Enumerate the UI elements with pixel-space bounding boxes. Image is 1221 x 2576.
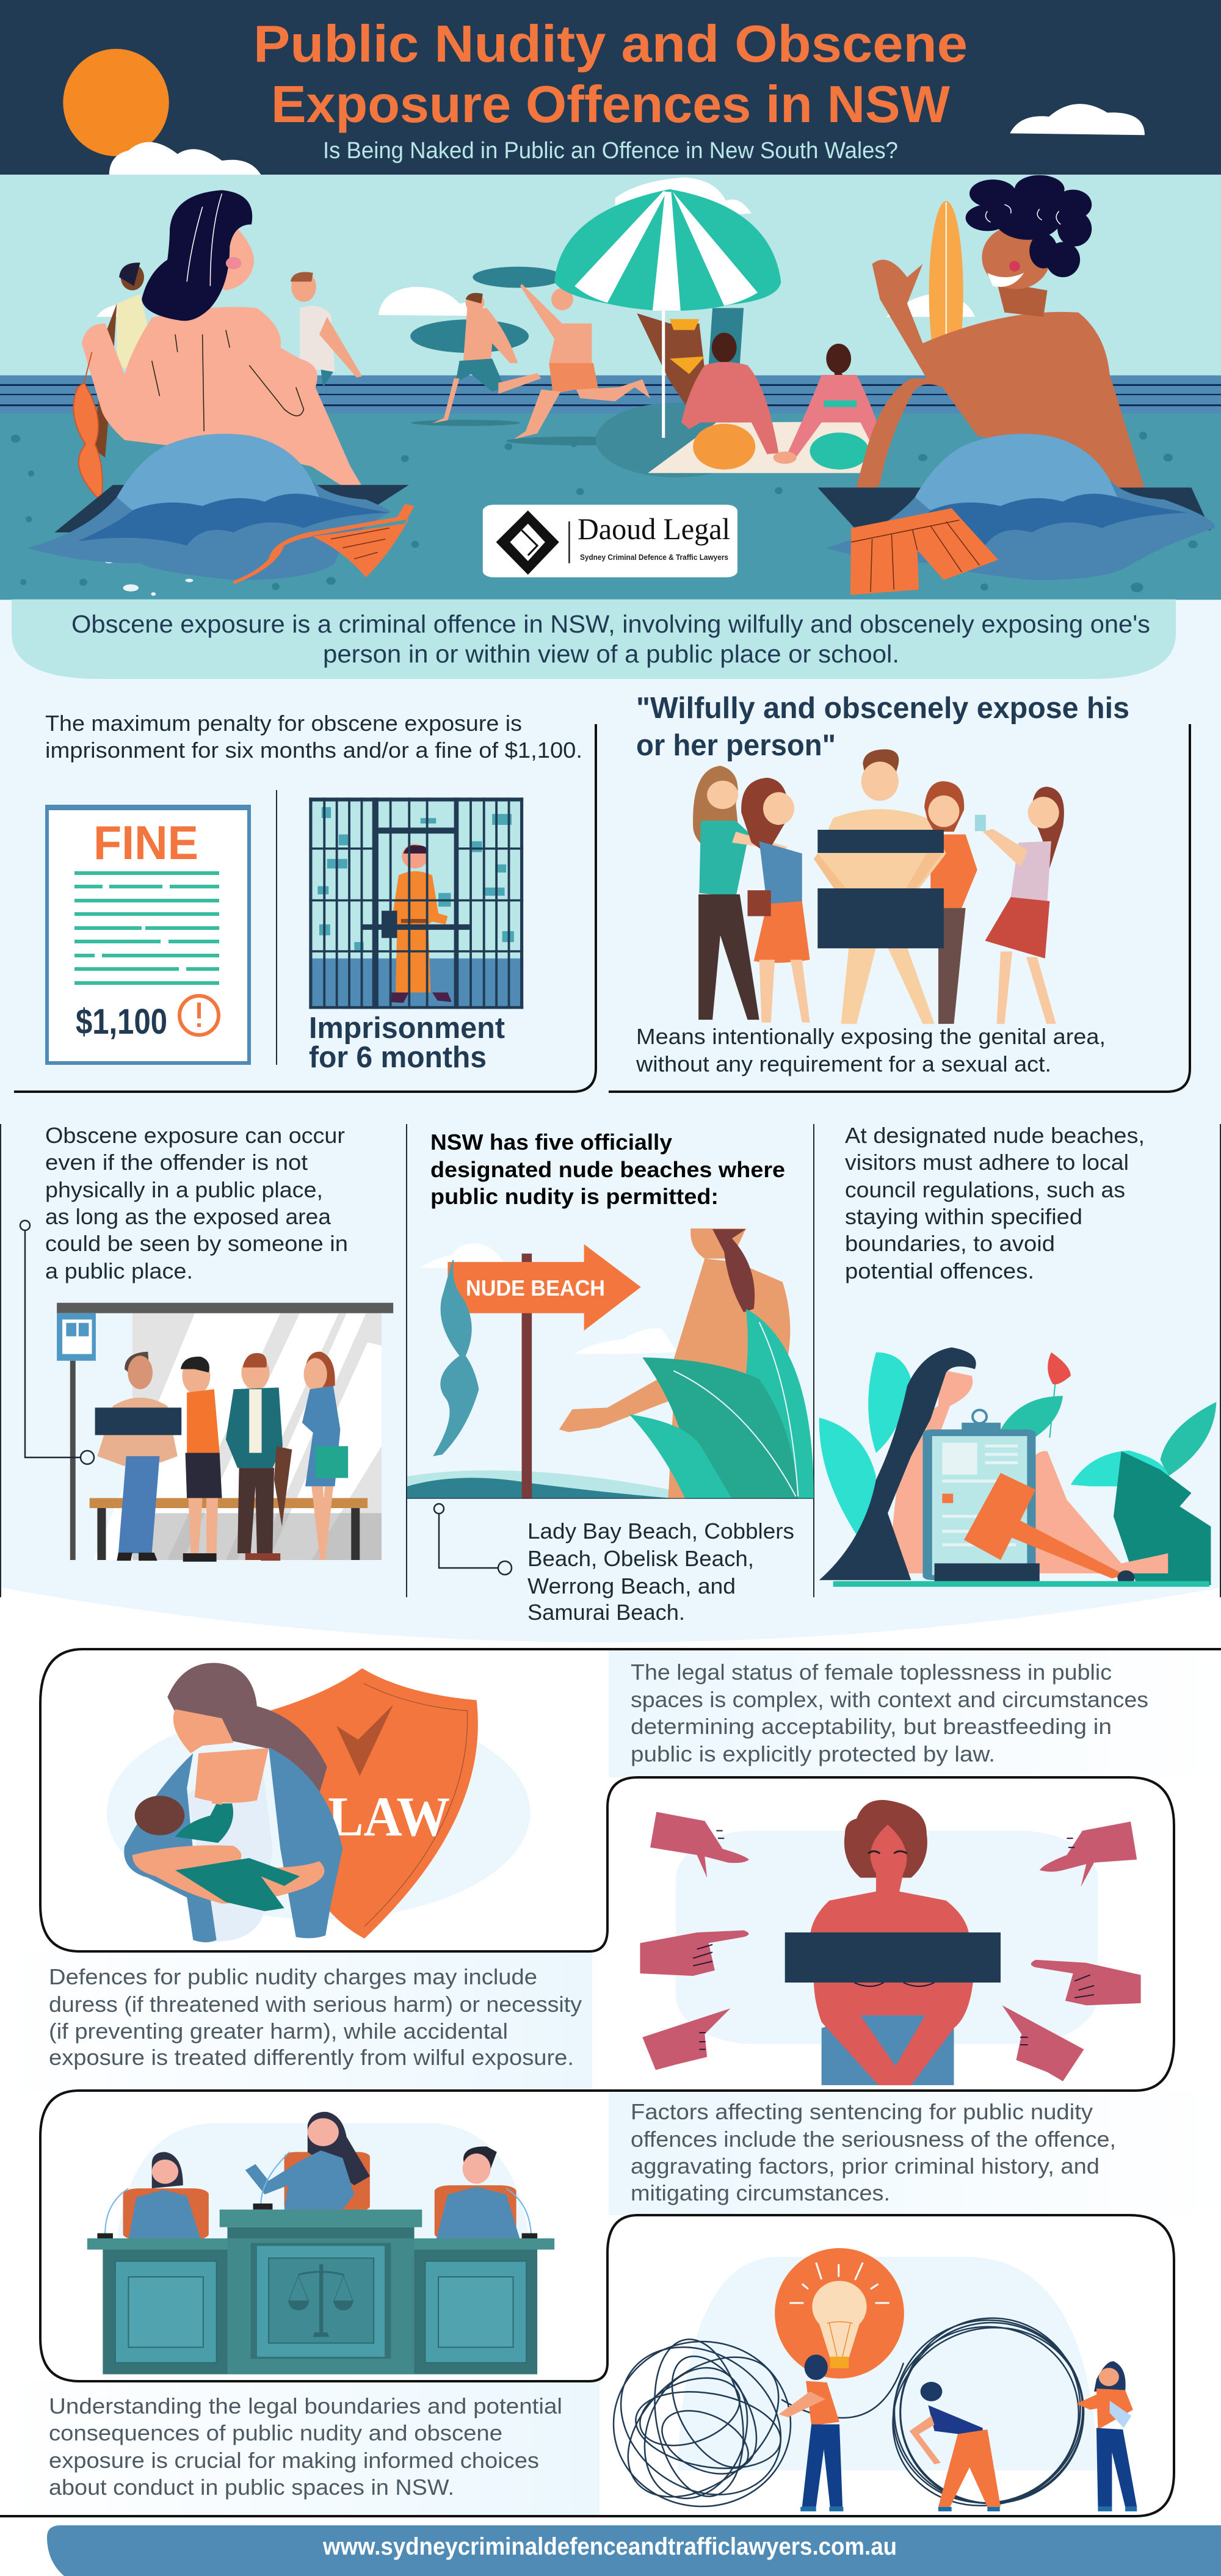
penalty text: imprisonment for six months and/or a fine of $1,100. (45, 738, 582, 763)
panel: maximum penalty (14, 711, 596, 1092)
logo wordmark (578, 512, 730, 562)
column text: even if the offender is not (45, 1150, 308, 1175)
female toplessness text: spaces is complex, with context and circumstances (631, 1687, 1148, 1712)
panel: definition of wilfully and obscenely expose (609, 692, 1190, 1092)
woman from behind (559, 1228, 790, 1499)
censor bars (817, 830, 944, 948)
icon: right cloud (1010, 104, 1145, 135)
logo wordmark: Daoud Legal (578, 512, 730, 546)
jail cell illustration (309, 797, 523, 1009)
column text: boundaries, to avoid (845, 1231, 1055, 1256)
imprisonment label: Imprisonment (309, 1012, 505, 1045)
woman right (1076, 2361, 1137, 2511)
defences text (49, 1964, 582, 2070)
cell bars (309, 797, 523, 1009)
imprisonment label (309, 1012, 505, 1074)
right officer (435, 2146, 537, 2240)
exposed man (814, 749, 946, 1024)
column: local council regulations (819, 1123, 1216, 1587)
woman under umbrella (637, 308, 744, 405)
light panel behind female toplessness text (609, 1650, 1221, 1777)
title: Public Nudity and Obscene (253, 15, 968, 73)
footer bar (47, 2525, 1221, 2576)
sentencing factors text: mitigating circumstances. (631, 2180, 890, 2205)
hero: header band and beach scene (0, 0, 1221, 679)
clipboard (922, 1410, 1040, 1582)
right dark mat (817, 488, 1211, 530)
distant surfers and runners (410, 267, 654, 445)
orange bikini bottom (234, 504, 415, 584)
connector line with nodes (20, 1221, 94, 1464)
column text: council regulations, such as (845, 1177, 1125, 1202)
closing text: about conduct in public spaces in NSW. (49, 2475, 454, 2500)
female toplessness text (631, 1660, 1148, 1766)
panel: idea and tangled thread illustration (592, 2248, 1137, 2536)
sentencing factors text: Factors affecting sentencing for public nudity (631, 2099, 1093, 2124)
panel: courtroom illustration (87, 2112, 554, 2375)
panel: woman being pointed at (640, 1800, 1141, 2085)
imprisonment label: for 6 months (309, 1041, 487, 1074)
penalty text: The maximum penalty for obscene exposure is (45, 711, 522, 736)
finger creases (693, 1830, 1094, 2049)
fine document: $1,100 (76, 1002, 167, 1042)
hanging bikini (433, 1260, 479, 1456)
foliage (819, 1352, 1216, 1585)
column text: physically in a public place, (45, 1177, 323, 1202)
right man (853, 175, 1176, 513)
left dark mat (54, 485, 409, 532)
orange swim shorts (850, 508, 998, 595)
fine document (45, 805, 251, 1063)
sky (0, 175, 1221, 377)
panel border (609, 724, 1190, 1092)
sky clouds (96, 177, 975, 317)
woman in red skirt (975, 786, 1064, 1024)
column: designated nude beaches (407, 1130, 814, 1625)
icon: left cloud (109, 142, 262, 176)
woman figure (810, 1800, 973, 2085)
woman left (779, 2354, 843, 2511)
law text: LAW (328, 1785, 450, 1848)
column text: At designated nude beaches, (845, 1123, 1145, 1148)
left officer (97, 2152, 209, 2240)
subtitle: Is Being Naked in Public an Offence in New South Wales? (323, 138, 898, 164)
beach towel and shade (596, 402, 894, 477)
header band (0, 0, 1221, 175)
judges bench (87, 2210, 554, 2375)
connector line with nodes (434, 1504, 512, 1575)
defences text: (if preventing greater harm), while accidental (49, 2019, 508, 2044)
defences text: duress (if threatened with serious harm) or necessity (49, 1992, 582, 2017)
prisoner (387, 844, 452, 1003)
judge (245, 2112, 370, 2211)
censor bar (785, 1932, 1001, 1983)
definition text (636, 1024, 1106, 1076)
woman in teal (693, 766, 786, 1020)
female toplessness text: public is explicitly protected by law. (631, 1741, 995, 1766)
defences text: exposure is treated differently from wilful exposure. (49, 2045, 574, 2070)
light panel behind closing text (0, 2381, 600, 2516)
left blue wave mound (27, 434, 391, 580)
tangled thread ball (592, 2317, 904, 2525)
woman with clipboard and gavel illustration (819, 1348, 1216, 1587)
panel: breastfeeding illustration (107, 1663, 531, 1942)
orange bikini top (73, 352, 103, 502)
backdrop and lightbulb (678, 2248, 1098, 2470)
woman figure (819, 1348, 1168, 1580)
nude beach sign text: NUDE BEACH (466, 1275, 605, 1301)
woman center (910, 2382, 1001, 2511)
column text: a public place. (45, 1258, 193, 1283)
closing text: exposure is crucial for making informed choices (49, 2448, 539, 2473)
logo card (483, 505, 737, 578)
column text (45, 1123, 348, 1283)
logo wordmark: Sydney Criminal Defence & Traffic Lawyers (580, 553, 728, 562)
penalty text (45, 711, 582, 763)
closing text (49, 2393, 562, 2500)
column text: as long as the exposed area (45, 1204, 332, 1229)
light panel behind defences text (0, 1951, 592, 2091)
exposed man at stop (97, 1352, 178, 1561)
sand (0, 413, 1221, 600)
man in green jacket (226, 1353, 292, 1561)
closing text: consequences of public nudity and obscene (49, 2420, 502, 2445)
umbrella pole (662, 308, 665, 438)
female toplessness text: The legal status of female toplessness in public (631, 1660, 1112, 1685)
beach list: Werrong Beach, and (527, 1573, 736, 1598)
censor bar (95, 1407, 181, 1435)
palm leaves (629, 1309, 814, 1499)
crowd illustration (693, 749, 1064, 1024)
beach list: Samurai Beach. (527, 1600, 685, 1625)
bold intro text: NSW has five officially (430, 1130, 672, 1155)
definition text: without any requirement for a sexual act. (636, 1051, 1051, 1076)
defences text: Defences for public nudity charges may include (49, 1964, 537, 1989)
striped umbrella (554, 189, 781, 311)
column text: staying within specified (845, 1204, 1082, 1229)
sentencing factors text: aggravating factors, prior criminal history, and (631, 2153, 1100, 2179)
bold intro text: designated nude beaches where (430, 1157, 785, 1182)
woman in blue and orange (741, 778, 810, 1023)
icon: sun (63, 49, 169, 156)
heading: or her person" (636, 729, 836, 762)
title: Exposure Offences in NSW (271, 76, 951, 134)
panel border (14, 724, 596, 1092)
column text: could be seen by someone in (45, 1231, 348, 1256)
beach list: Beach, Obelisk Beach, (527, 1546, 754, 1571)
bus stop illustration (57, 1303, 393, 1562)
column: view of a public place (20, 1123, 393, 1562)
heading: "Wilfully and obscenely expose his (636, 692, 1129, 725)
bold intro text: public nudity is permitted: (430, 1184, 719, 1209)
gavel (964, 1473, 1134, 1585)
intro statement: Obscene exposure is a criminal offence in NSW, involving wilfully and obscenely exposing one's (71, 610, 1150, 638)
man in orange (181, 1357, 222, 1562)
sea (0, 376, 1221, 414)
people pulling thread (779, 2354, 1137, 2511)
pointing hands (640, 1812, 1141, 2081)
definition text: Means intentionally exposing the genital area, (636, 1024, 1106, 1049)
intro statement (71, 610, 1150, 668)
sentencing factors text: offences include the seriousness of the offence, (631, 2127, 1116, 2152)
column text: potential offences. (845, 1258, 1034, 1283)
heading (636, 692, 1129, 762)
column text (845, 1123, 1145, 1283)
backdrop blob and shield (107, 1668, 531, 1939)
female toplessness text: determining acceptability, but breastfeeding in (631, 1714, 1112, 1739)
column text: Obscene exposure can occur (45, 1123, 345, 1148)
woman in orange top (924, 782, 977, 1024)
left woman (82, 190, 370, 499)
beach list: Lady Bay Beach, Cobblers (527, 1518, 794, 1544)
winding outline (0, 1649, 1221, 2516)
scales of justice (288, 2264, 353, 2337)
woman with bag (302, 1352, 348, 1560)
nude beach illustration (407, 1228, 814, 1499)
beach list (527, 1518, 794, 1625)
sentencing factors text (631, 2099, 1116, 2205)
background figures behind left woman (93, 263, 362, 458)
sand speckles (11, 432, 1198, 596)
mother and baby (124, 1663, 342, 1942)
banner behind intro text (12, 600, 1176, 679)
column text: visitors must adhere to local (845, 1150, 1129, 1175)
orange surfboard (929, 201, 963, 384)
closing text: Understanding the legal boundaries and potential (49, 2393, 562, 2418)
fine document: FINE (93, 816, 198, 869)
bold intro text (430, 1130, 785, 1209)
divider (276, 790, 277, 1065)
website url: www.sydneycriminaldefenceandtrafficlawyers.com.au (322, 2533, 897, 2560)
sitting couple holding hands (681, 333, 886, 470)
thread ring (863, 2293, 1112, 2536)
intro statement: person in or within view of a public place or school. (323, 640, 899, 668)
column dividers (0, 1124, 1221, 1597)
right blue wave mound (825, 434, 1215, 580)
title (253, 15, 968, 134)
winding outline connecting lower panels (0, 1649, 1221, 2516)
light panel behind sentencing text (609, 2091, 1221, 2215)
